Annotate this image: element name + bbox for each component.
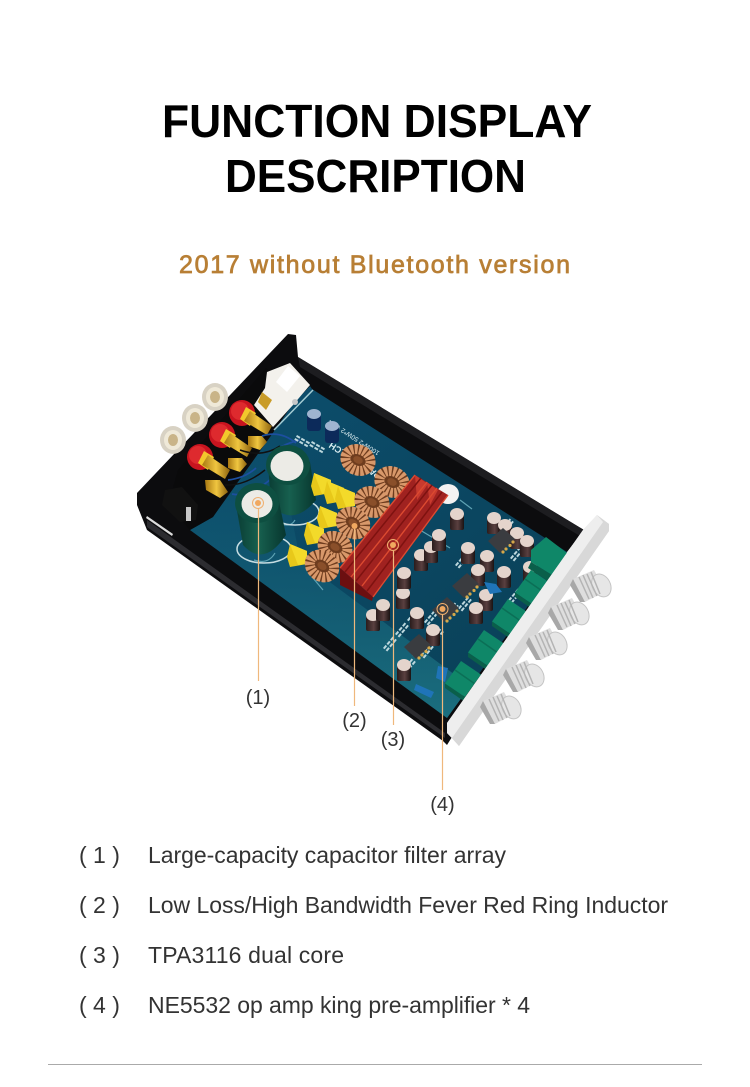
white speaker connector [254, 363, 310, 427]
title [162, 95, 592, 202]
small electrolytic capacitors [366, 508, 537, 681]
item 4: ( 4 ) [79, 992, 120, 1018]
item 1: Large-capacity capacitor filter array [148, 842, 506, 868]
circuit board: TPA3116 2.1CH [327, 440, 387, 484]
rca sockets [160, 383, 228, 454]
case: black aluminium enclosure [137, 334, 584, 745]
circuit board [190, 386, 567, 718]
yellow film capacitors [287, 473, 355, 567]
callout 4: (4) [430, 794, 455, 816]
callout 3 [381, 540, 405, 751]
red speaker terminals [187, 400, 300, 498]
op amp chips [404, 528, 515, 660]
title: FUNCTION DISPLAY [162, 95, 592, 147]
green potentiometers [445, 537, 567, 702]
copper toroid inductors [299, 439, 415, 589]
callout 4 [430, 604, 455, 816]
black inner wall [168, 368, 276, 530]
blue trimmers [414, 582, 502, 698]
callout 1 [246, 498, 270, 709]
navy capacitors [307, 409, 339, 443]
white chip sticker [437, 484, 459, 504]
large filter capacitors [235, 445, 319, 563]
callout 1: (1) [246, 687, 270, 709]
aluminium knobs [480, 570, 615, 724]
callout 3: (3) [381, 729, 405, 751]
item 2: Low Loss/High Bandwidth Fever Red Ring Inductor [148, 892, 668, 918]
circuit board: 100W*2 50W*2 V1.4 [327, 418, 381, 456]
dc power jack [162, 487, 198, 522]
silver front panel [447, 515, 609, 746]
callout 2: (2) [342, 710, 367, 732]
feature list [79, 842, 668, 1018]
item 3: TPA3116 dual core [148, 942, 344, 968]
item 2: ( 2 ) [79, 892, 120, 918]
item 1: ( 1 ) [79, 842, 120, 868]
red heatsink [340, 475, 448, 601]
item 3: ( 3 ) [79, 942, 120, 968]
product photo: amplifier board [137, 334, 615, 746]
subtitle: 2017 without Bluetooth version [179, 251, 570, 279]
item 4: NE5532 op amp king pre-amplifier * 4 [148, 992, 530, 1018]
silk printed resistors [294, 435, 524, 674]
title: DESCRIPTION [225, 150, 526, 202]
callout 2 [342, 523, 367, 732]
